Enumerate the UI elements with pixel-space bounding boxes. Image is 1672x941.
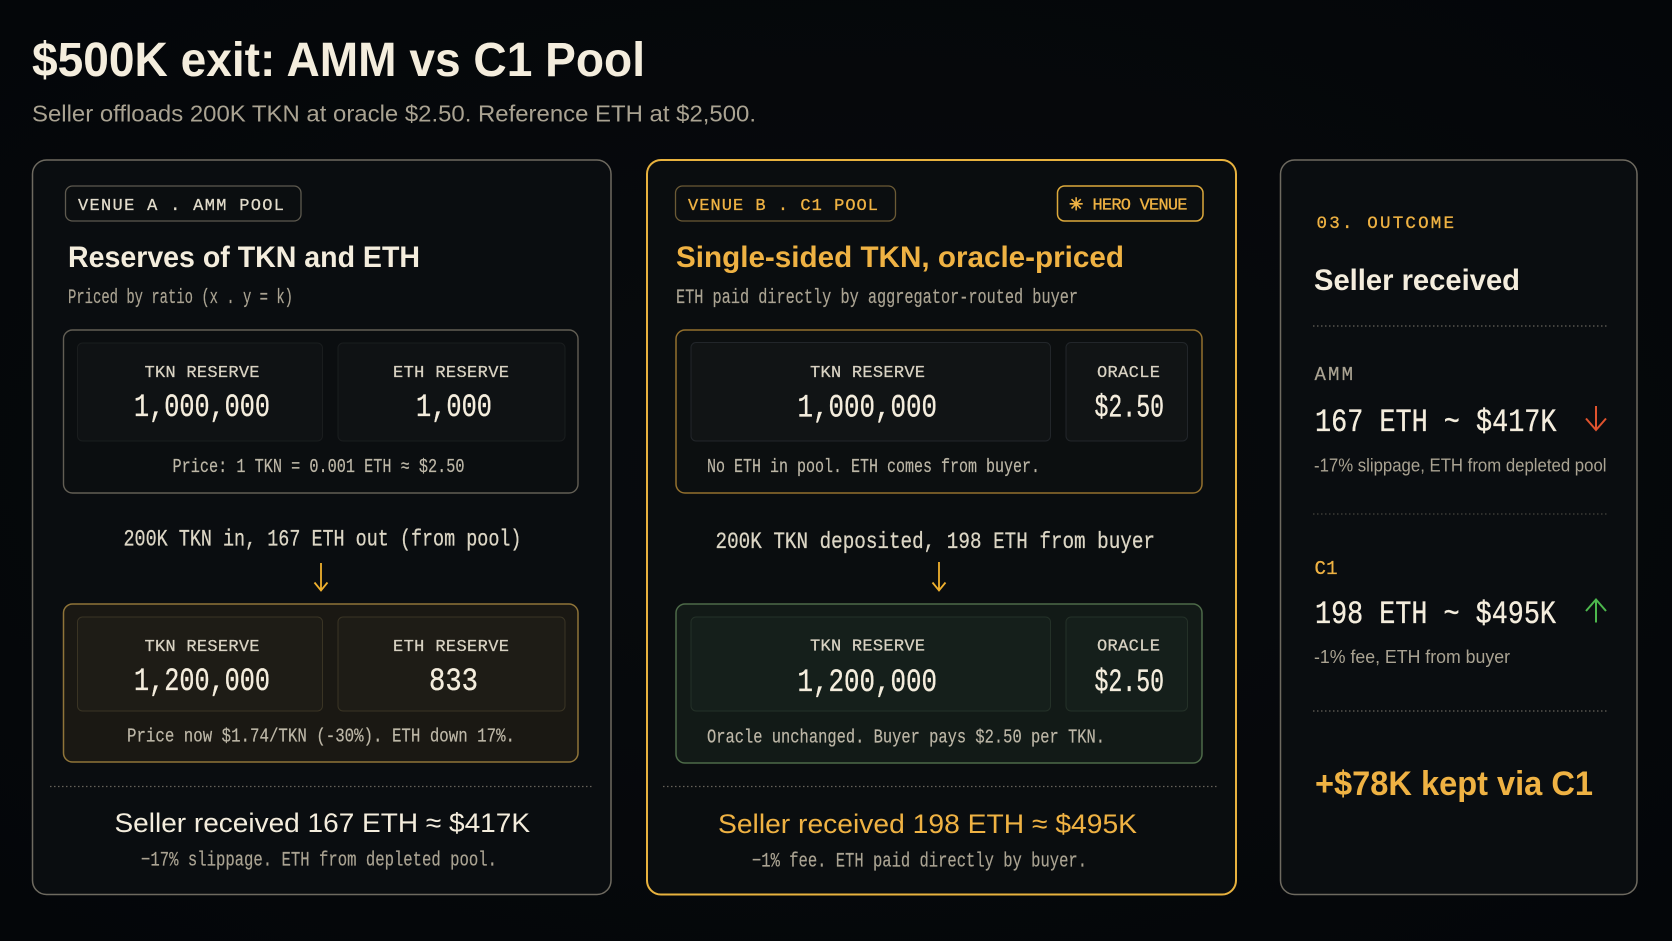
cell: ETH reserve after: 833 [429,663,478,700]
flow label: 200K TKN in, 167 ETH out (from pool) [124,526,522,552]
note: price now: Price now $1.74/TKN (-30%). ETH down 17%. [127,726,515,748]
badge: venue B [676,186,896,221]
cell: TKN reserve: 1,000,000 [798,390,937,426]
cell: ETH reserve [338,343,565,441]
row: C1 outcome: C1 [1314,558,1338,580]
callout: kept via C1: +$78K kept via C1 [1315,765,1593,803]
cell: TKN reserve: TKN RESERVE [144,364,260,383]
result detail C1: −1% fee. ETH paid directly by buyer. [752,850,1087,874]
note: oracle unchanged: Oracle unchanged. Buyer pays $2.50 per TKN. [707,726,1105,748]
heading: reserves: Reserves of TKN and ETH [68,241,420,274]
arrow: down [932,562,946,590]
cell: ETH reserve after: ETH RESERVE [393,638,509,657]
panel: venue B C1 pool (hero) [647,160,1236,894]
badge: hero venue: ✳ [1069,195,1083,215]
cell: oracle price [1066,342,1188,441]
row: C1 outcome: -1% fee, ETH from buyer [1314,647,1510,667]
row: AMM outcome: 167 ETH ~ $417K [1315,404,1557,441]
row: AMM outcome: AMM [1314,364,1353,386]
cell: TKN reserve after: TKN RESERVE [144,638,260,657]
flow label: 200K TKN deposited, 198 ETH from buyer [716,529,1155,555]
before state: oracle box [676,330,1202,493]
cell: ETH reserve after [338,617,565,711]
cell: TKN reserve after [78,617,322,711]
cell: oracle price after: $2.50 [1094,664,1164,701]
cell: TKN reserve after: TKN RESERVE [810,638,925,656]
cell: ETH reserve: ETH RESERVE [393,364,509,383]
cell: TKN reserve after: 1,200,000 [134,663,270,700]
arrow: down [314,563,328,590]
badge: venue A: VENUE A . AMM POOL [78,197,284,216]
row: C1 outcome [1314,558,1606,667]
subtitle: Seller offloads 200K TKN at oracle $2.50. Reference ETH at $2,500. [32,100,756,126]
after state: reserves box [64,604,578,762]
row: AMM outcome: -17% slippage, ETH from depleted pool [1314,456,1606,476]
result detail AMM: −17% slippage. ETH from depleted pool. [141,850,497,872]
row: C1 outcome: 198 ETH ~ $495K [1315,596,1557,633]
cell: TKN reserve [691,342,1050,441]
panel: outcome [1280,160,1637,894]
subheading: priced by ratio: Priced by ratio (x . y = k) [68,287,293,310]
result: seller received C1: Seller received 198 ETH ≈ $495K [718,809,1137,839]
icon: red down arrow [1586,406,1606,430]
cell: TKN reserve: 1,000,000 [134,389,270,426]
before state: reserves box [64,330,578,493]
cell: oracle price: $2.50 [1094,390,1164,426]
cell: oracle price: ORACLE [1097,364,1160,383]
cell: oracle price after [1066,617,1188,711]
title: $500K exit: AMM vs C1 Pool [32,34,645,87]
icon: green up arrow [1586,600,1606,622]
row: AMM outcome [1314,364,1606,476]
note: no ETH in pool: No ETH in pool. ETH comes from buyer. [707,456,1040,478]
cell: TKN reserve: TKN RESERVE [810,364,925,383]
heading: seller received: Seller received [1314,264,1520,297]
cell: TKN reserve after [691,617,1050,711]
result: seller received AMM: Seller received 167 ETH ≈ $417K [114,808,530,838]
panel: venue A AMM pool [32,160,611,894]
subheading: ETH paid directly: ETH paid directly by aggregator-routed buyer [676,287,1078,310]
badge: venue A [66,186,301,221]
cell: TKN reserve after: 1,200,000 [798,664,937,701]
cell: TKN reserve [78,343,322,441]
cell: oracle price after: ORACLE [1097,638,1160,656]
badge: hero venue: HERO VENUE [1092,196,1188,216]
badge: venue B: VENUE B . C1 POOL [688,197,878,216]
badge: hero venue [1058,186,1203,221]
note: price: Price: 1 TKN = 0.001 ETH ≈ $2.50 [172,456,464,478]
cell: ETH reserve: 1,000 [416,389,492,426]
section label: outcome: 03. OUTCOME [1316,214,1454,234]
after state: oracle box [676,604,1202,763]
heading: single-sided: Single-sided TKN, oracle-priced [676,241,1124,274]
